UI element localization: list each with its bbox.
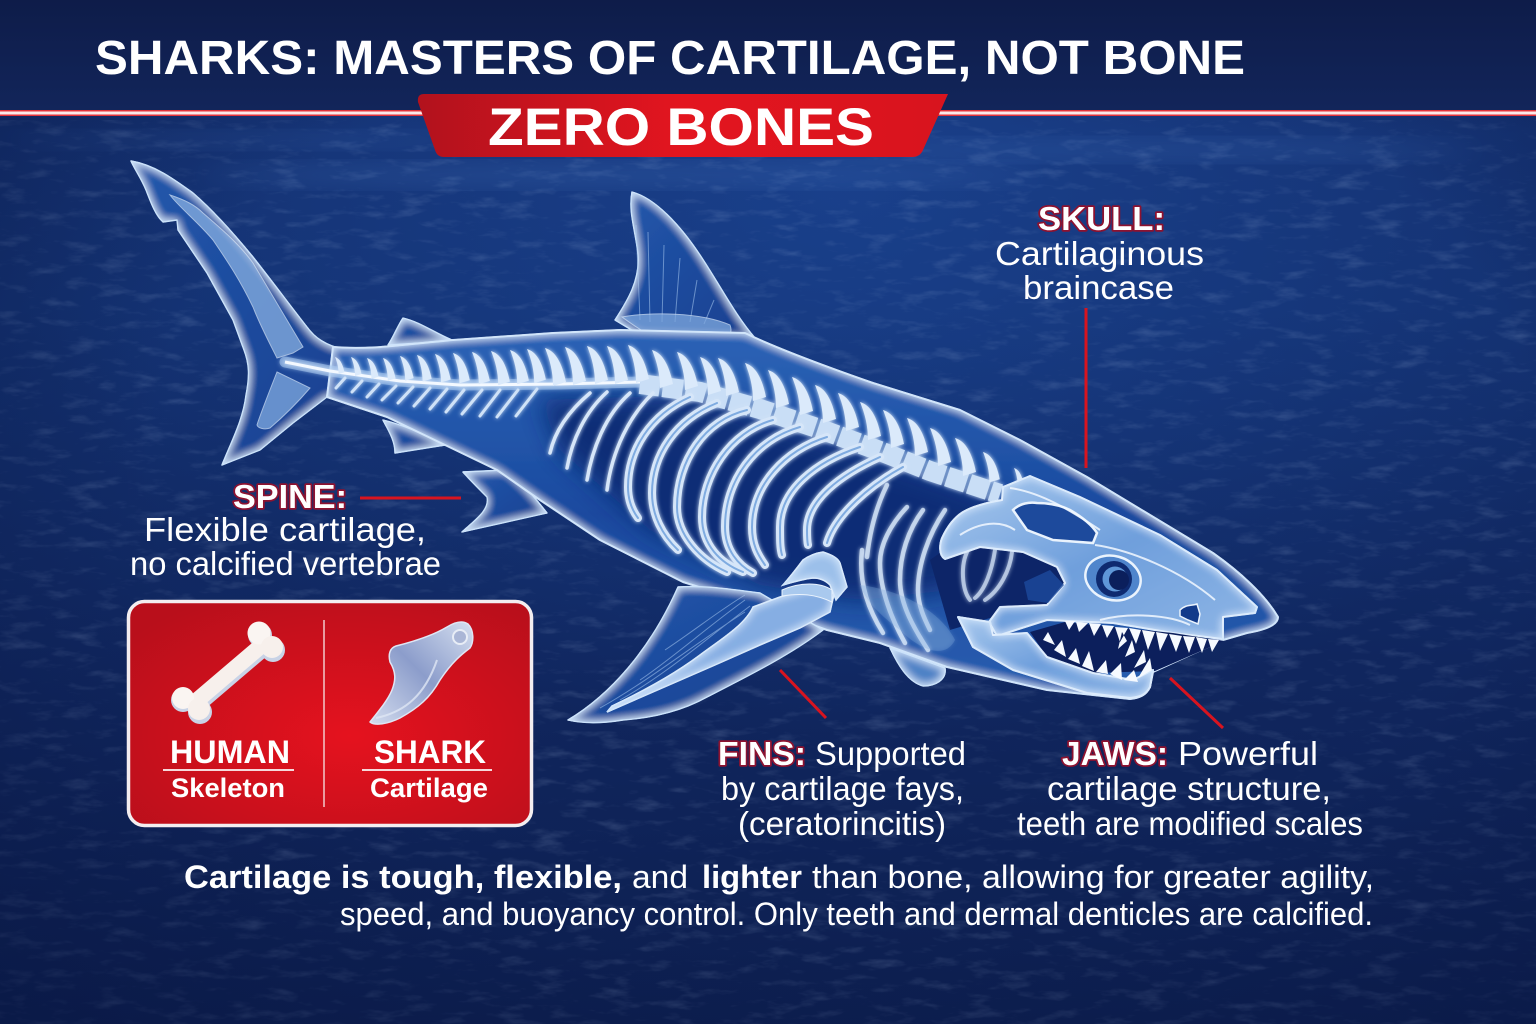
label: shark cartilage <box>362 734 492 803</box>
second dorsal fin <box>388 318 452 345</box>
first dorsal fin <box>615 192 755 345</box>
body <box>327 330 1278 699</box>
label: shark cartilage: SHARK <box>374 734 486 770</box>
mouth cavity <box>1030 622 1224 673</box>
callout: fins: FINS: <box>718 735 806 772</box>
callout: jaws <box>1017 678 1363 842</box>
belly fin <box>890 648 945 686</box>
label: human skeleton: Skeleton <box>171 773 285 803</box>
teeth <box>1043 621 1219 682</box>
badge: zero bones: ZERO BONES <box>488 98 874 157</box>
callout: spine: Flexible cartilage, <box>144 511 426 548</box>
callout: jaws: teeth are modified scales <box>1017 805 1363 842</box>
label: human skeleton: HUMAN <box>170 734 290 770</box>
callout: fins: Supported <box>815 735 966 772</box>
spine and neural spines <box>285 345 1023 494</box>
callout: jaws: JAWS: <box>1062 735 1168 772</box>
summary text <box>184 859 1374 932</box>
callout: spine <box>130 478 461 582</box>
callout: spine: no calcified vertebrae <box>130 545 441 582</box>
callout: skull: braincase <box>1023 269 1174 306</box>
summary text: than bone, allowing for greater agility, <box>812 859 1374 895</box>
ribs <box>550 392 1012 651</box>
label: shark cartilage: Cartilage <box>370 773 488 803</box>
skull <box>940 476 1257 639</box>
callout: spine: SPINE: <box>233 478 347 515</box>
callout: fins <box>718 670 966 842</box>
pelvic fin <box>462 440 567 532</box>
summary text: and <box>632 859 688 895</box>
pectoral fin <box>568 552 847 723</box>
summary text: speed, and buoyancy control. Only teeth and dermal denticles are calcified. <box>340 896 1373 932</box>
skull highlight ridges <box>960 488 1215 625</box>
body shading: dark rib cavity <box>540 395 1065 630</box>
skull inner cavity shape <box>1024 570 1064 603</box>
anal fin <box>383 420 445 453</box>
callout: fins: by cartilage fays, <box>721 770 964 807</box>
skull upper window <box>1013 503 1097 543</box>
tail fin <box>131 161 345 465</box>
summary text: Cartilage is tough, flexible, <box>184 859 622 895</box>
callout: jaws: cartilage structure, <box>1047 770 1331 807</box>
lower jaw <box>958 617 1153 698</box>
callout: skull: Cartilaginous <box>995 235 1204 272</box>
panel: human skeleton vs shark cartilage <box>128 602 532 826</box>
callout: skull: SKULL: <box>1038 200 1165 237</box>
icon: bone <box>171 622 285 724</box>
badge: zero bones <box>418 94 948 157</box>
callout: jaws: Powerful <box>1178 735 1318 772</box>
callout: fins: (ceratorincitis) <box>738 805 946 842</box>
nasal opening <box>1180 604 1200 624</box>
summary text: lighter <box>702 859 802 895</box>
callout: skull <box>995 200 1204 468</box>
header band <box>0 0 1536 110</box>
title: SHARKS: MASTERS OF CARTILAGE, NOT BONE <box>95 32 1245 85</box>
shark skeleton illustration <box>131 161 1278 723</box>
label: human skeleton <box>163 734 294 803</box>
eye socket <box>1080 550 1146 606</box>
icon: shark cartilage piece <box>370 622 473 724</box>
header rule: white and red line <box>0 110 1536 116</box>
